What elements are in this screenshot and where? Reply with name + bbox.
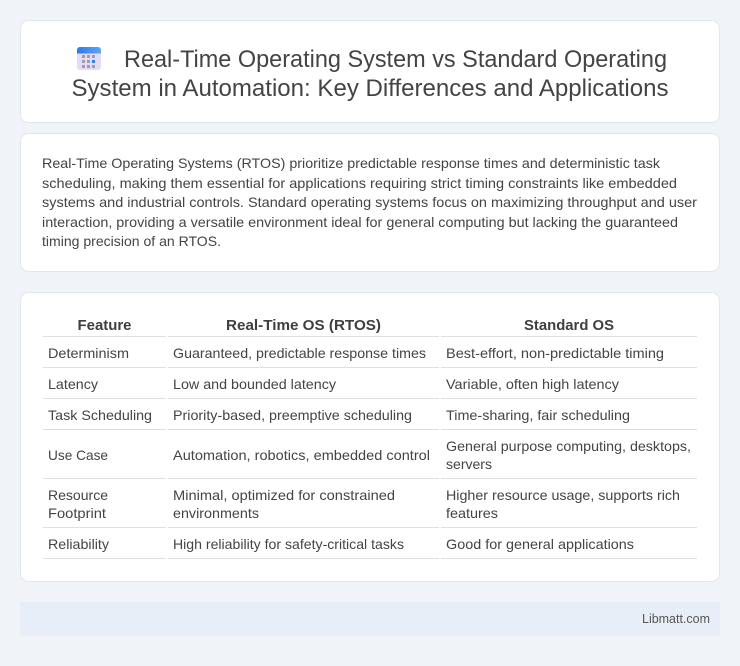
row: latency: Low and bounded latency	[173, 376, 336, 392]
row: latency: Variable, often high latency	[446, 376, 619, 392]
footer credit: Libmatt.com	[642, 612, 710, 626]
row: resource footprint: features	[446, 505, 498, 521]
row: resource footprint: Resource	[48, 487, 108, 503]
footer bar	[20, 602, 720, 636]
intro text: systems and industrial controls. Standard operating systems focus on maximizing throughput and user	[42, 194, 697, 210]
row: resource footprint: environments	[173, 505, 259, 521]
title: Real-Time Operating System vs Standard Operating	[124, 46, 667, 73]
title panel	[20, 20, 720, 122]
row: use case: Automation, robotics, embedded control	[173, 447, 430, 463]
row: resource footprint: Higher resource usage, supports rich	[446, 487, 680, 503]
row: determinism: Determinism	[48, 345, 129, 361]
row: resource footprint: Minimal, optimized for constrained	[173, 487, 395, 503]
table header	[78, 318, 614, 334]
icon: calendar grid	[77, 47, 101, 70]
row rules	[43, 336, 697, 559]
row: reliability: Reliability	[48, 536, 109, 552]
row: reliability	[48, 536, 634, 552]
intro text: interaction, providing a versatile environment ideal for general computing but lacking the guaranteed	[42, 214, 678, 230]
row: task scheduling: Task Scheduling	[48, 407, 152, 423]
row: resource footprint: Footprint	[48, 505, 106, 521]
row: determinism	[48, 345, 664, 361]
intro text: Real-Time Operating Systems (RTOS) prioritize predictable response times and deterministic task	[42, 155, 661, 171]
row: task scheduling: Priority-based, preemptive scheduling	[173, 407, 412, 423]
row: determinism: Best-effort, non-predictable timing	[446, 345, 664, 361]
row: task scheduling	[48, 407, 630, 423]
row: latency	[48, 376, 619, 392]
table header: Standard OS	[524, 318, 614, 334]
row: use case: Use Case	[48, 447, 108, 463]
row: latency: Latency	[48, 376, 98, 392]
row: use case: servers	[446, 456, 492, 472]
row: use case	[48, 438, 691, 472]
intro text: timing precision of an RTOS.	[42, 233, 221, 249]
table header: Feature	[78, 318, 132, 334]
row: reliability: Good for general applications	[446, 536, 634, 552]
row: resource footprint	[48, 487, 680, 521]
panel: introduction	[20, 134, 720, 272]
panel: comparison table	[20, 292, 720, 582]
row: use case: General purpose computing, desktops,	[446, 438, 691, 454]
row: task scheduling: Time-sharing, fair scheduling	[446, 407, 630, 423]
table header: Real-Time OS (RTOS)	[226, 318, 381, 334]
title	[72, 46, 668, 102]
row: reliability: High reliability for safety-critical tasks	[173, 536, 404, 552]
title: System in Automation: Key Differences and Applications	[72, 75, 668, 102]
intro text: scheduling, making them essential for applications requiring strict timing constraints like embedded	[42, 175, 677, 191]
row: determinism: Guaranteed, predictable response times	[173, 345, 426, 361]
intro text	[42, 155, 697, 249]
